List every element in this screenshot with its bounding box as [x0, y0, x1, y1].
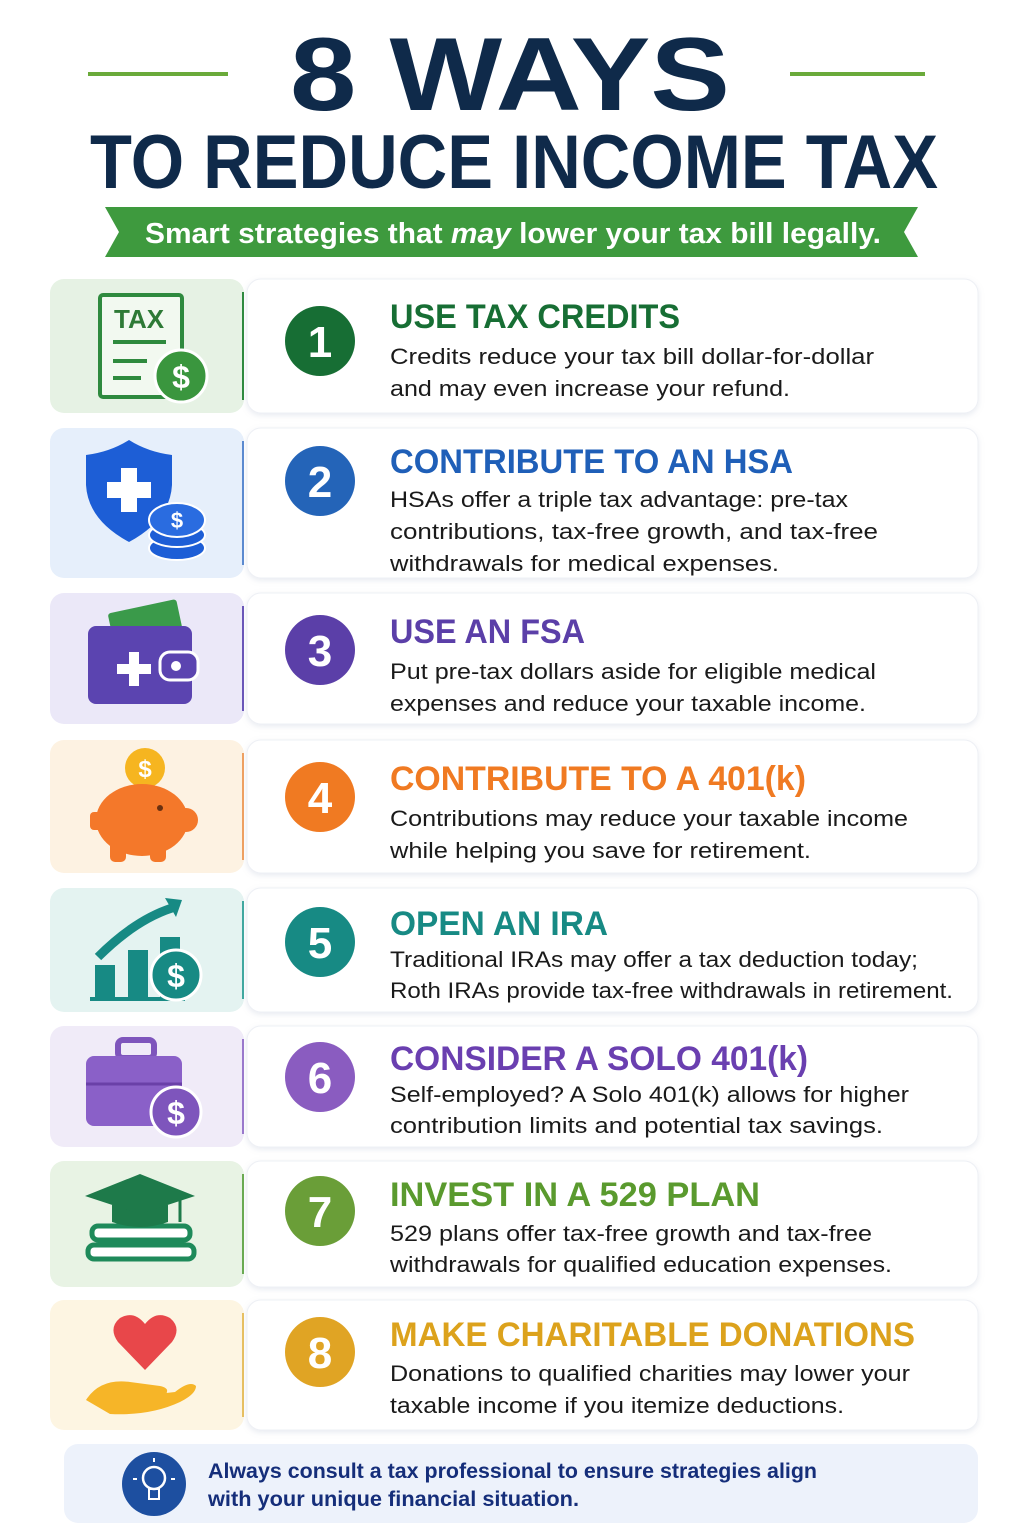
text 4 — [389, 806, 908, 863]
text 2: withdrawals for medical expenses. — [389, 551, 779, 576]
title — [88, 17, 938, 205]
number 5: 5 — [308, 919, 332, 968]
row 2: HSA — [50, 428, 978, 578]
text 7: withdrawals for qualified education expenses. — [389, 1252, 892, 1277]
heading 8: MAKE CHARITABLE DONATIONS — [390, 1316, 915, 1354]
text 8 — [390, 1361, 910, 1418]
row 1: use tax credits — [50, 279, 978, 413]
number 1: 1 — [308, 318, 332, 367]
text 8: Donations to qualified charities may lower your — [390, 1361, 910, 1386]
icon: briefcase — [86, 1040, 201, 1137]
text 2: HSAs offer a triple tax advantage: pre-tax — [390, 487, 848, 512]
number 6: 6 — [308, 1054, 332, 1103]
footer callout: Always consult a tax professional to ensure strategies align — [208, 1460, 817, 1483]
text 3: Put pre-tax dollars aside for eligible medical — [390, 659, 876, 684]
number 8: 8 — [308, 1329, 332, 1378]
number 5 — [285, 907, 355, 977]
row 5: IRA — [50, 888, 978, 1012]
text 1 — [390, 344, 874, 401]
icon: growth chart: $ — [167, 958, 185, 994]
text 7 — [389, 1221, 892, 1277]
heading 5: OPEN AN IRA — [390, 905, 608, 943]
number 3 — [285, 615, 355, 685]
subtitle banner — [105, 207, 918, 257]
heading 2: CONTRIBUTE TO AN HSA — [390, 443, 793, 481]
number 8 — [285, 1317, 355, 1387]
icon: piggy bank: $ — [138, 756, 152, 783]
icon: lightbulb — [122, 1452, 186, 1516]
heading 4: CONTRIBUTE TO A 401(k) — [390, 760, 806, 798]
row 8: charitable donations — [50, 1300, 978, 1430]
text 5: Roth IRAs provide tax-free withdrawals in retirement. — [390, 978, 953, 1003]
row 6: solo 401k — [50, 1026, 978, 1147]
subtitle banner: Smart strategies that may lower your tax bill legally. — [145, 218, 881, 250]
text 3: expenses and reduce your taxable income. — [390, 691, 866, 716]
text 1: and may even increase your refund. — [390, 376, 790, 401]
title: 8 WAYS — [290, 17, 730, 133]
icon: shield and coins — [86, 440, 205, 560]
icon: wallet — [88, 599, 198, 704]
number 6 — [285, 1042, 355, 1112]
text 8: taxable income if you itemize deductions. — [390, 1393, 844, 1418]
number 3: 3 — [308, 627, 332, 676]
icon: tax document — [100, 295, 207, 402]
title: TO REDUCE INCOME TAX — [90, 120, 938, 205]
icon: briefcase: $ — [167, 1095, 185, 1131]
footer callout — [64, 1444, 978, 1523]
text 2 — [389, 487, 878, 576]
text 2: contributions, tax-free growth, and tax-free — [390, 519, 878, 544]
icon: books and cap — [85, 1174, 195, 1259]
number 7: 7 — [308, 1188, 332, 1237]
text 4: Contributions may reduce your taxable income — [390, 806, 908, 831]
footer callout: with your unique financial situation. — [207, 1488, 579, 1511]
text 6: Self-employed? A Solo 401(k) allows for higher — [390, 1082, 909, 1107]
icon: heart in hand — [86, 1315, 196, 1414]
text 4: while helping you save for retirement. — [389, 838, 811, 863]
row 3: FSA — [50, 593, 978, 724]
row 7: 529 plan — [50, 1161, 978, 1287]
text 5: Traditional IRAs may offer a tax deduction today; — [390, 947, 918, 972]
text 6 — [390, 1082, 909, 1138]
number 4 — [285, 762, 355, 832]
number 2: 2 — [308, 458, 332, 507]
text 5 — [390, 947, 953, 1003]
heading 3: USE AN FSA — [390, 613, 585, 651]
text 1: Credits reduce your tax bill dollar-for-dollar — [390, 344, 874, 369]
number 4: 4 — [308, 774, 333, 823]
number 2 — [285, 446, 355, 516]
icon: tax document: TAX — [114, 304, 165, 334]
heading 7: INVEST IN A 529 PLAN — [390, 1176, 760, 1214]
text 7: 529 plans offer tax-free growth and tax-free — [390, 1221, 872, 1246]
icon: tax document: $ — [172, 359, 190, 395]
icon: shield and coins: $ — [171, 508, 183, 533]
row 4: 401k — [50, 740, 978, 873]
heading 6: CONSIDER A SOLO 401(k) — [390, 1040, 808, 1078]
text 6: contribution limits and potential tax savings. — [390, 1113, 883, 1138]
number 7 — [285, 1176, 355, 1246]
text 3 — [390, 659, 876, 716]
icon: growth chart — [90, 898, 201, 1000]
heading 1: USE TAX CREDITS — [390, 298, 680, 336]
number 1 — [285, 306, 355, 376]
icon: piggy bank — [90, 748, 198, 862]
